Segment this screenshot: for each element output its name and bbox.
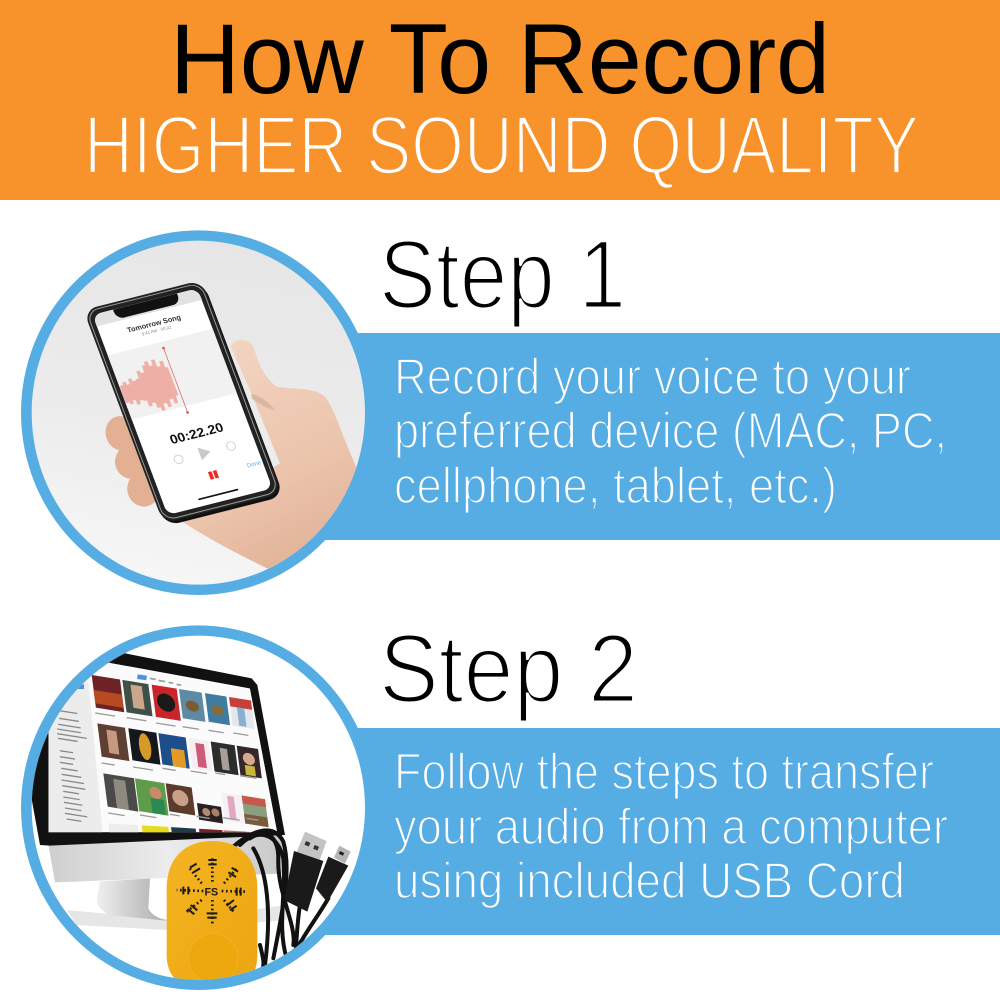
done label: Done xyxy=(246,460,263,469)
timer: 00:22.20 xyxy=(167,420,226,447)
album row 2 xyxy=(97,723,262,782)
text block: step 2 description: your audio from a computer xyxy=(394,798,948,855)
recording time: 9:41 AM · 00:22 xyxy=(141,324,173,337)
sidebar list xyxy=(57,710,87,822)
album row 1 xyxy=(92,675,255,733)
FS logo text: FS xyxy=(205,887,218,899)
text block: step 1 description xyxy=(394,348,947,514)
header band xyxy=(0,0,1000,200)
pause button xyxy=(208,470,219,480)
panel: step 2 blue band xyxy=(300,728,1000,935)
monitor screen xyxy=(48,662,277,846)
text block: step 2 description xyxy=(394,743,948,909)
monitor chin xyxy=(48,832,288,882)
desk shadow xyxy=(67,905,287,930)
USB-A plug xyxy=(284,832,327,912)
waveform xyxy=(120,359,178,411)
text block: step 2 description: Follow the steps to transfer xyxy=(394,743,934,800)
starburst spokes xyxy=(177,858,245,923)
playback controls xyxy=(174,441,236,464)
photo circle: computer and device xyxy=(20,625,376,992)
micro USB plug xyxy=(316,846,351,902)
text block: step 1 description: Record your voice to your xyxy=(394,348,911,405)
yellow FS device xyxy=(167,841,257,985)
notch xyxy=(113,294,181,319)
sidebar highlight xyxy=(78,684,84,689)
heading: step 1: Step 1 xyxy=(379,220,626,329)
sidebar xyxy=(48,682,103,832)
status bar xyxy=(93,288,202,326)
USB cables xyxy=(233,830,328,972)
device button xyxy=(189,934,238,983)
hand: fingers xyxy=(106,416,156,507)
monitor stand xyxy=(97,878,170,921)
home indicator xyxy=(198,489,239,500)
smartphone xyxy=(83,280,284,526)
starburst stripes xyxy=(183,860,241,918)
hand: thumb web crease xyxy=(252,393,275,410)
album captions xyxy=(95,712,259,821)
panel: step 1 blue band xyxy=(300,333,1000,540)
text block: step 2 description: using included USB Cord xyxy=(394,852,905,909)
text block: step 1 description: cellphone, tablet, etc.) xyxy=(394,457,837,514)
waveform area xyxy=(108,329,237,420)
heading: step 2: Step 2 xyxy=(379,614,638,723)
title: How To Record xyxy=(170,3,830,114)
recording title: Tomorrow Song xyxy=(126,313,182,335)
album row 4 xyxy=(108,824,252,832)
album row 3 xyxy=(103,773,269,833)
toolbar tabs xyxy=(137,674,181,686)
monitor bezel xyxy=(20,651,285,846)
playhead xyxy=(162,347,189,414)
photo circle: phone in hand xyxy=(20,230,376,597)
hand: palm and thumb xyxy=(180,340,358,569)
